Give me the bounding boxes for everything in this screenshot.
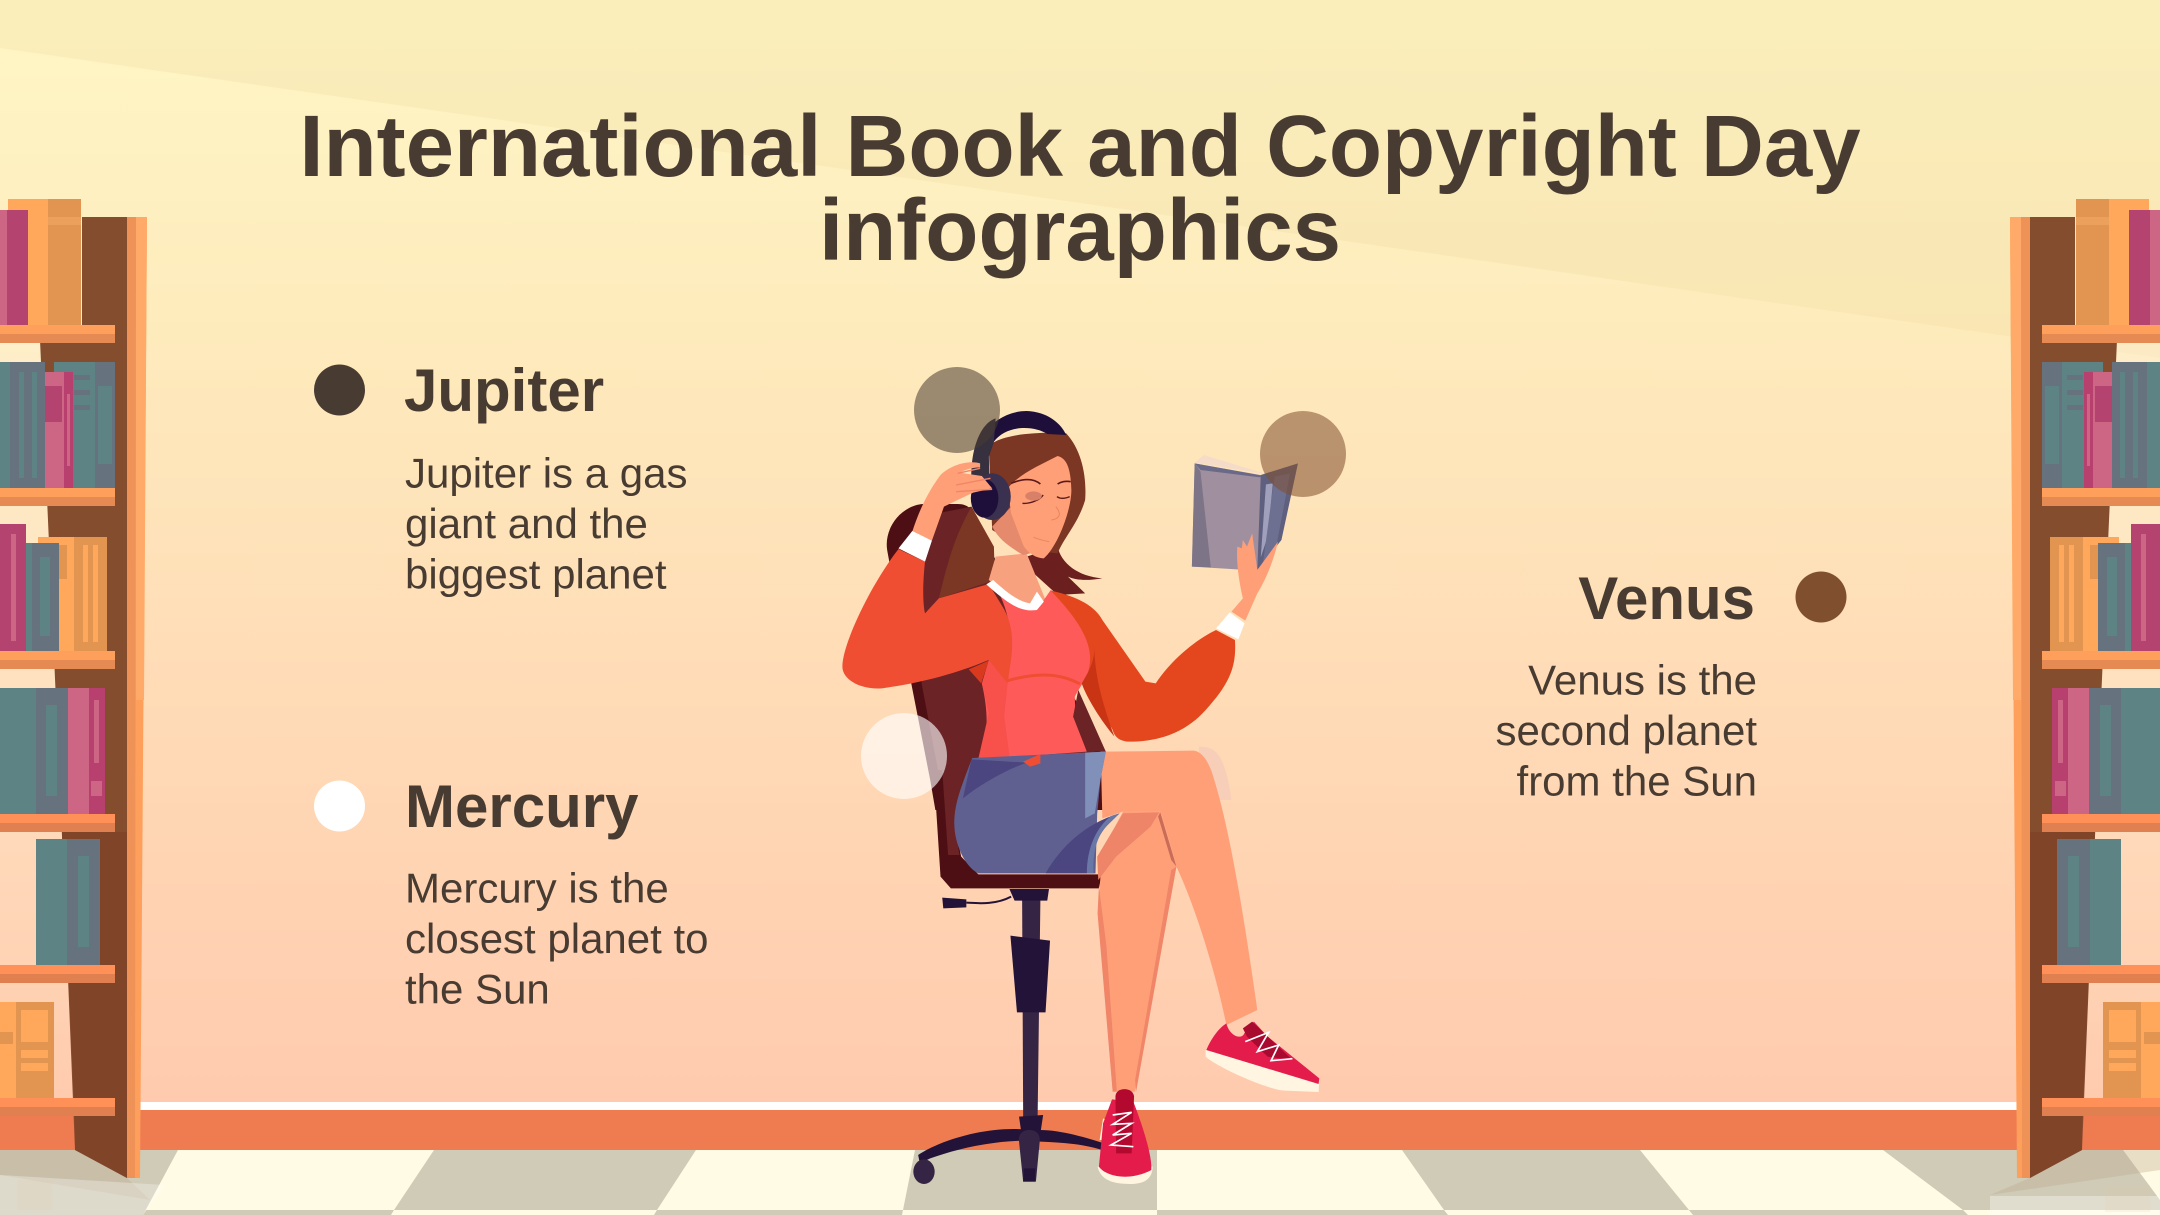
collar [986,580,1044,610]
Mercury description: Mercury is the [405,864,669,912]
legs and skirt [954,751,1257,1092]
books row 4 [0,688,105,814]
headphones [971,411,1066,483]
Jupiter description: Jupiter is a gas [405,450,687,496]
panel: Jupiter [314,357,687,598]
title: International Book and Copyright Day [299,98,1861,195]
Mercury description: closest planet to [405,915,709,962]
Jupiter description: giant and the [405,500,648,547]
bookcase left [0,199,147,1178]
books row 3 [0,524,107,651]
Jupiter marker [314,364,365,416]
books row 5 [36,839,100,965]
sneakers [1098,1022,1319,1184]
chair side right of torso [1073,690,1106,752]
head [989,433,1085,553]
floor reflection left [0,1150,165,1215]
decorative circle: dark [914,367,1000,453]
skirt [954,752,1106,873]
far sleeve [1051,591,1235,742]
bookcase side board [127,217,147,1178]
Venus description: Venus is the [1528,656,1757,704]
Mercury marker [314,780,365,832]
bookcase lower post shading [62,832,127,1178]
planted sneaker [1098,1089,1153,1184]
Mercury heading: Mercury [405,773,639,840]
top wall light beam [0,0,2160,358]
bookcase back shadow panel [0,343,74,1116]
title: infographics [819,182,1341,279]
Venus marker [1796,572,1846,622]
hair back, torso and arms [842,411,1298,800]
right side hair wisp [1027,547,1102,595]
Venus description: second planet [1495,707,1757,754]
skirting board [0,1102,2160,1150]
decorative circle: brown [1260,411,1346,497]
books row 1 [0,199,81,325]
illustration: woman reading on office chair [842,411,1319,1184]
skirt upper shading [963,754,1040,798]
Mercury description: the Sun [405,966,550,1012]
Venus heading: Venus [1578,565,1755,632]
torso [978,590,1094,767]
raised sneaker [1206,1022,1319,1092]
Jupiter heading: Jupiter [404,357,604,424]
Jupiter description: biggest planet [405,550,667,598]
raised hand and forearm [912,462,992,541]
book [1192,455,1298,571]
checkered floor [0,1150,2160,1215]
near sleeve [842,549,1012,689]
bookcase post [40,217,127,1178]
decorative circle: white [861,713,947,799]
hand holding book [1231,533,1278,621]
panel: Mercury [314,773,709,1012]
Venus description: from the Sun [1517,758,1757,804]
books row 6 [0,1002,54,1098]
bookcase right [2010,199,2160,1178]
books row 2 [0,362,115,488]
shelves [0,325,115,1116]
floor reflection right [1990,1150,2160,1215]
chair back [887,504,1106,810]
lower chair seat and base [913,770,1104,1184]
torso side panel [978,660,1010,760]
panel: Venus [1495,565,1846,804]
